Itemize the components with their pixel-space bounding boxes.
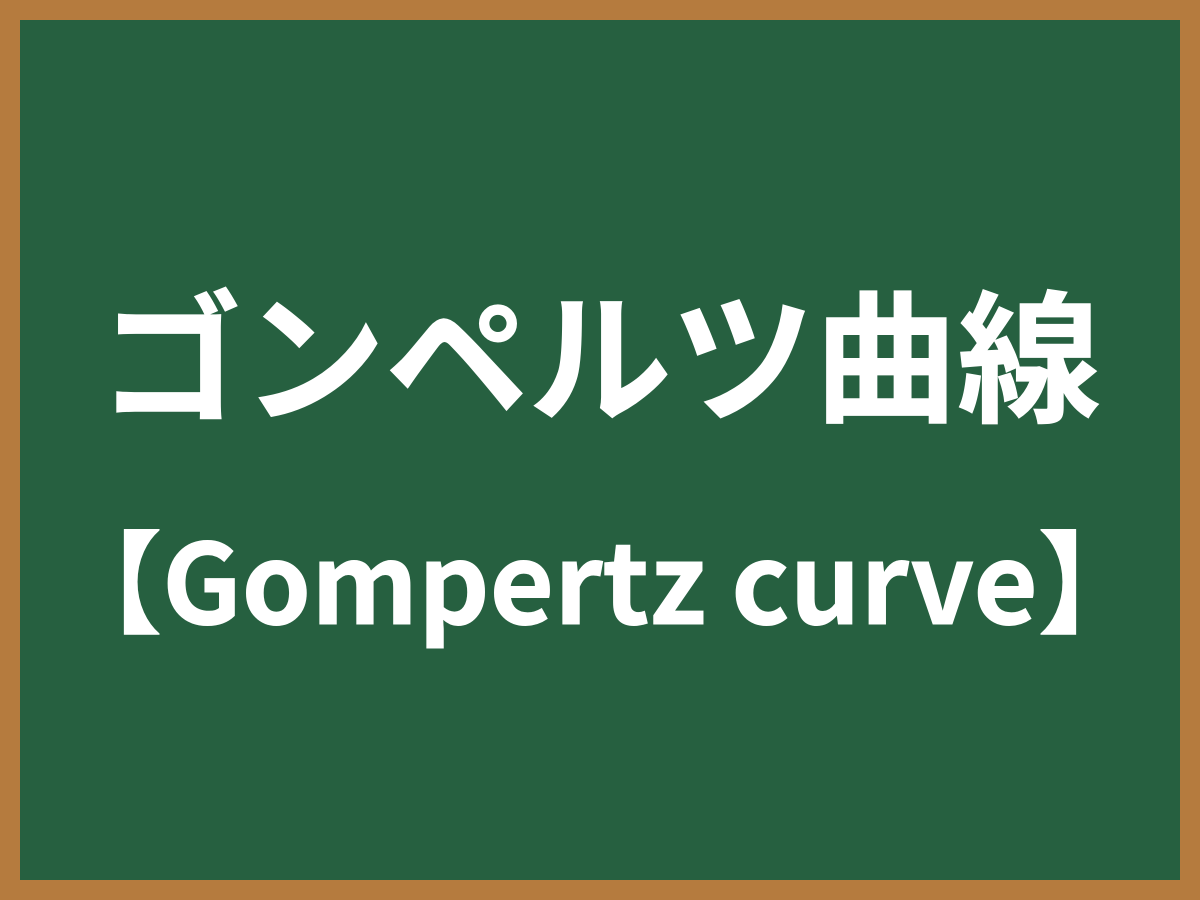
subtitle: English heading: 【Gompertz curve】 bbox=[51, 495, 1149, 656]
title: Japanese heading: ゴンペルツ曲線 bbox=[100, 246, 1100, 453]
